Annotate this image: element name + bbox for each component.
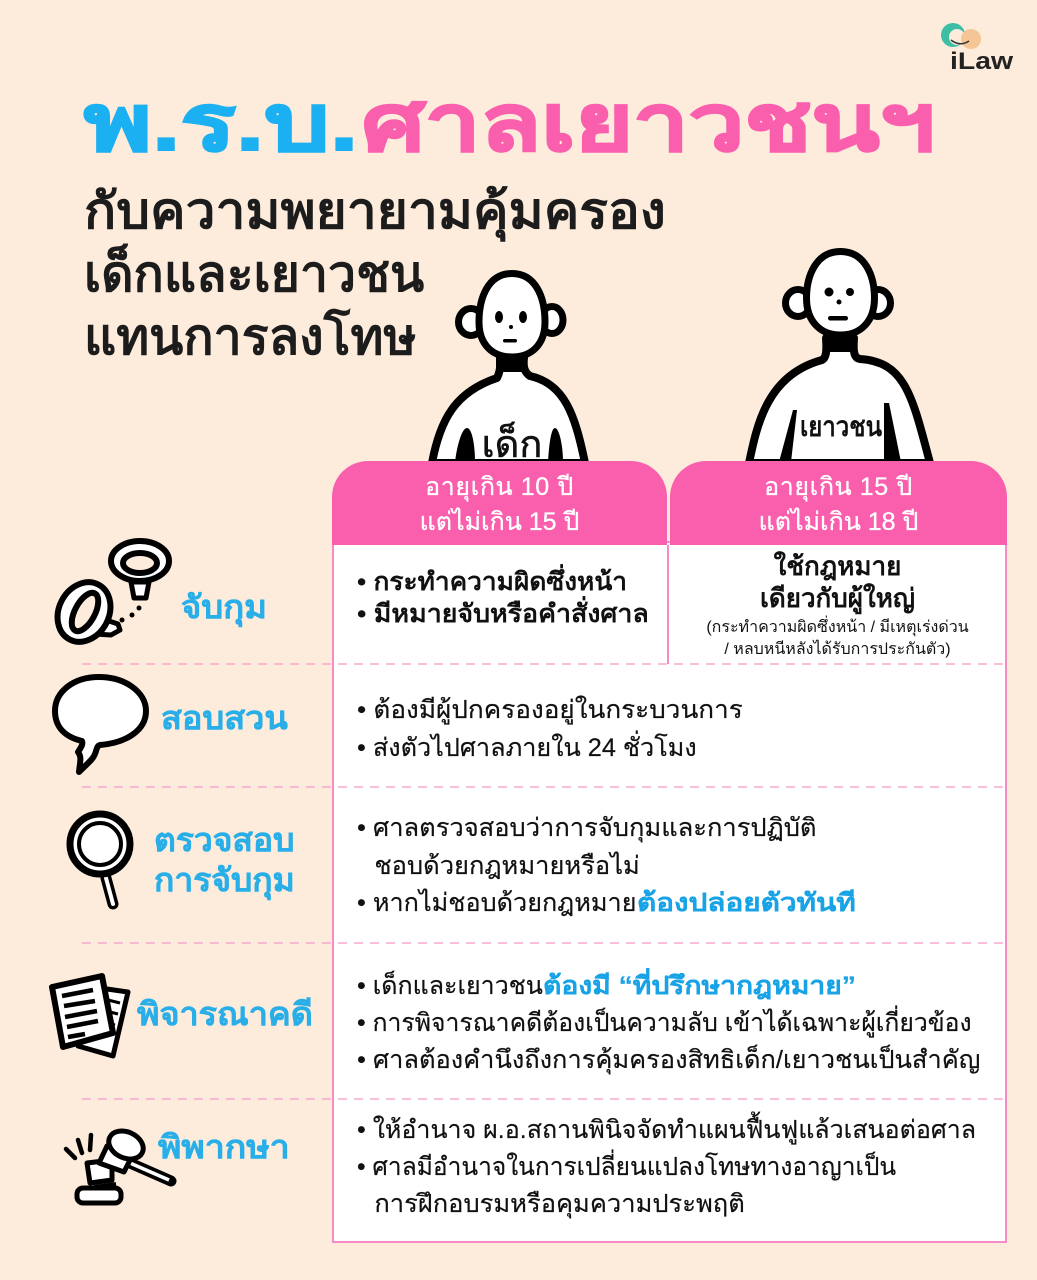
icon: magnifier [66, 810, 134, 910]
label: verdict: พิพากษา [158, 1129, 290, 1165]
icon: speech bubble [52, 674, 149, 775]
row 1: youth column [706, 551, 969, 658]
row 5 text: • ศาลมีอำนาจในการเปลี่ยนแปลงโทษทางอาญาเป็น [357, 1153, 896, 1181]
row 5 text [357, 1111, 976, 1218]
row 1: youth column: ใช้กฎหมาย [774, 551, 901, 581]
logo: iLaw: iLaw [950, 48, 1013, 75]
label: interrogate: สอบสวน [161, 700, 288, 736]
subtitle: แทนการลงโทษ [84, 309, 416, 365]
label: inspect arrest [154, 822, 295, 900]
column header: child age: แต่ไม่เกิน 15 ปี [420, 508, 579, 536]
column header: youth age: อายุเกิน 15 ปี [764, 473, 913, 501]
column header: child age [332, 461, 667, 545]
title: ศาลเยาวชนฯ [362, 79, 935, 167]
row 4 text: ต้องมี “ที่ปรึกษากฎหมาย” [543, 972, 856, 1000]
figure: child: เด็ก [482, 421, 542, 466]
subtitle: เด็กและเยาวชน [84, 246, 424, 302]
icon: handcuffs [54, 538, 172, 645]
row 2 text: • ส่งตัวไปศาลภายใน 24 ชั่วโมง [357, 734, 697, 762]
title: พ.ร.บ. [84, 79, 358, 167]
figure: youth [745, 248, 934, 461]
row 1: youth column: เดียวกับผู้ใหญ่ [760, 583, 915, 613]
row 4 text: • การพิจารณาคดีต้องเป็นความลับ เข้าได้เฉพาะผู้เกี่ยวข้อง [357, 1009, 972, 1037]
logo: iLaw [941, 23, 1014, 75]
row 1: youth column: / หลบหนีหลังได้รับการประกันตัว) [724, 641, 951, 658]
label: inspect arrest: การจับกุม [154, 862, 295, 898]
row 3 text [357, 814, 856, 917]
row 3 text: ต้องปล่อยตัวทันที [637, 889, 856, 917]
figure: youth: เยาวชน [800, 411, 882, 442]
row 5 text: • ให้อำนาจ ผ.อ.สถานพินิจจัดทำแผนฟื้นฟูแล้วเสนอต่อศาล [357, 1116, 976, 1144]
row 4 text [357, 968, 980, 1074]
label: trial: พิจารณาคดี [137, 996, 313, 1032]
title [83, 79, 935, 167]
subtitle: กับความพยายามคุ้มครอง [84, 183, 666, 239]
label: arrest: จับกุม [181, 589, 267, 625]
row 1: child column: • กระทำความผิดซึ่งหน้า [357, 568, 627, 596]
row 1: child column [357, 564, 649, 628]
column header: youth age: แต่ไม่เกิน 18 ปี [759, 508, 918, 536]
row 3 text: • หากไม่ชอบด้วยกฎหมาย [357, 889, 637, 917]
subtitle [84, 183, 666, 365]
table body [332, 541, 1007, 1243]
row 5 text: การฝึกอบรมหรือคุมความประพฤติ [374, 1190, 745, 1218]
row 3 text: • ศาลตรวจสอบว่าการจับกุมและการปฏิบัติ [357, 814, 816, 842]
row 1: youth column: (กระทำความผิดซึ่งหน้า / มีเหตุเร่งด่วน [706, 619, 969, 636]
column header: youth age [670, 461, 1007, 545]
row 2 text: • ต้องมีผู้ปกครองอยู่ในกระบวนการ [357, 696, 743, 724]
row 3 text: ชอบด้วยกฎหมายหรือไม่ [374, 852, 640, 880]
row 2 text [357, 695, 743, 762]
row 4 text: • เด็กและเยาวชน [357, 972, 543, 1000]
row 4 text: • ศาลต้องคำนึงถึงการคุ้มครองสิทธิเด็ก/เยาวชนเป็นสำคัญ [357, 1046, 980, 1074]
panel: table [332, 461, 1007, 1243]
figure: child [428, 270, 589, 466]
label: inspect arrest: ตรวจสอบ [154, 822, 294, 858]
column divider [667, 545, 669, 664]
column header: child age: อายุเกิน 10 ปี [425, 473, 574, 501]
row 1: child column: • มีหมายจับหรือคำสั่งศาล [357, 600, 649, 628]
